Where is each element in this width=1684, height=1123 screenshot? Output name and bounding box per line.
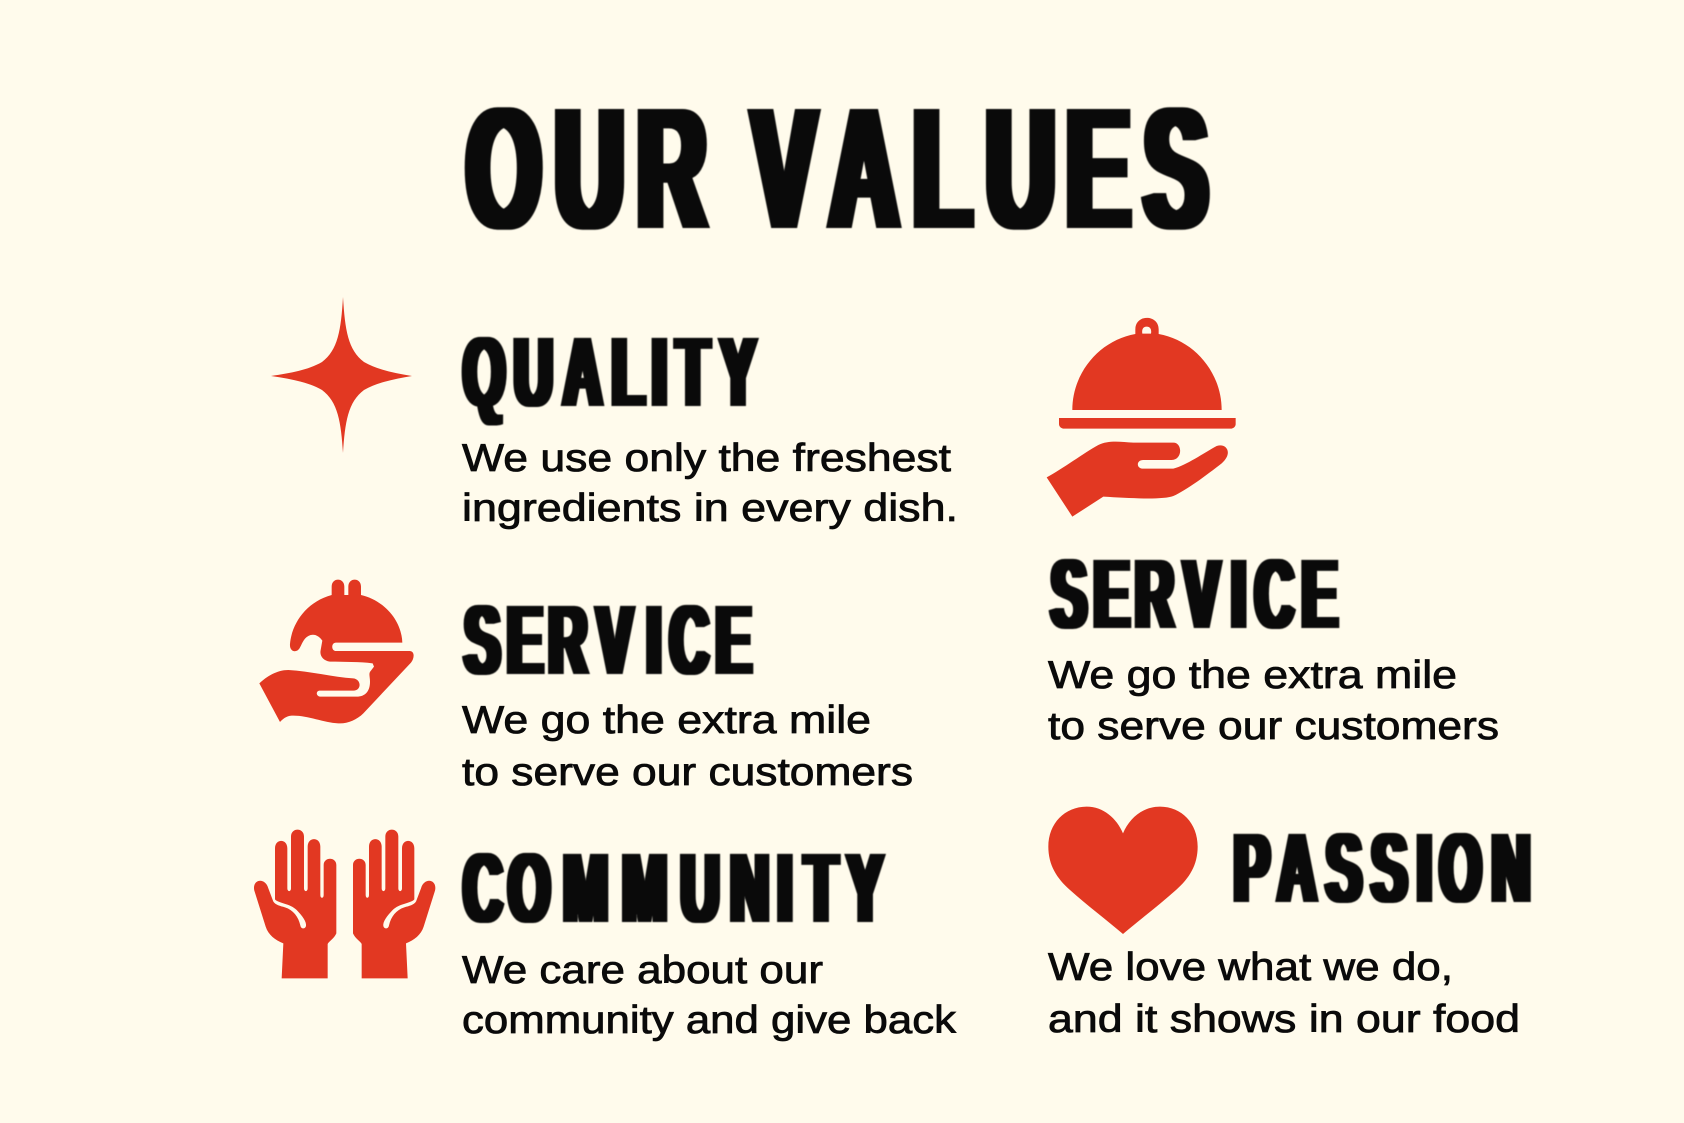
text: community description	[462, 949, 957, 1042]
text: service description: We go the extra mile	[462, 699, 871, 742]
text: passion description	[1048, 946, 1520, 1041]
icon: heart	[1048, 807, 1198, 934]
text: community description: We care about our	[462, 949, 823, 992]
panel: quality	[271, 297, 958, 530]
icon: two raised hands	[254, 830, 435, 978]
heading: community: COMMUNITY	[463, 832, 883, 943]
text: quality description: ingredients in every dish.	[462, 487, 958, 530]
heading: quality: QUALITY	[463, 316, 756, 427]
text: service description: to serve our customers	[1048, 705, 1499, 748]
text: passion description: and it shows in our food	[1048, 998, 1520, 1041]
panel: service right	[1047, 318, 1499, 748]
icon: cloche on hand, small	[259, 580, 414, 723]
icon: cloche on hand, large	[1047, 318, 1236, 517]
panel: passion	[1048, 807, 1530, 1041]
text: quality description: We use only the freshest	[462, 437, 951, 480]
heading: service: SERVICE	[1051, 538, 1337, 649]
panel: community	[254, 830, 957, 1042]
panel: service left	[259, 580, 913, 794]
text: passion description: We love what we do,	[1048, 946, 1453, 989]
text: service description: We go the extra mile	[1048, 654, 1457, 697]
title: OUR VALUES	[467, 71, 1208, 265]
heading: passion: PASSION	[1234, 812, 1530, 923]
text: service description: to serve our customers	[462, 751, 913, 794]
text: quality description	[462, 437, 958, 530]
text: service description	[1048, 654, 1499, 748]
heading: service: SERVICE	[464, 584, 751, 695]
icon: four-point star	[271, 297, 412, 453]
text: service description	[462, 699, 913, 794]
text: community description: community and give back	[462, 999, 957, 1042]
